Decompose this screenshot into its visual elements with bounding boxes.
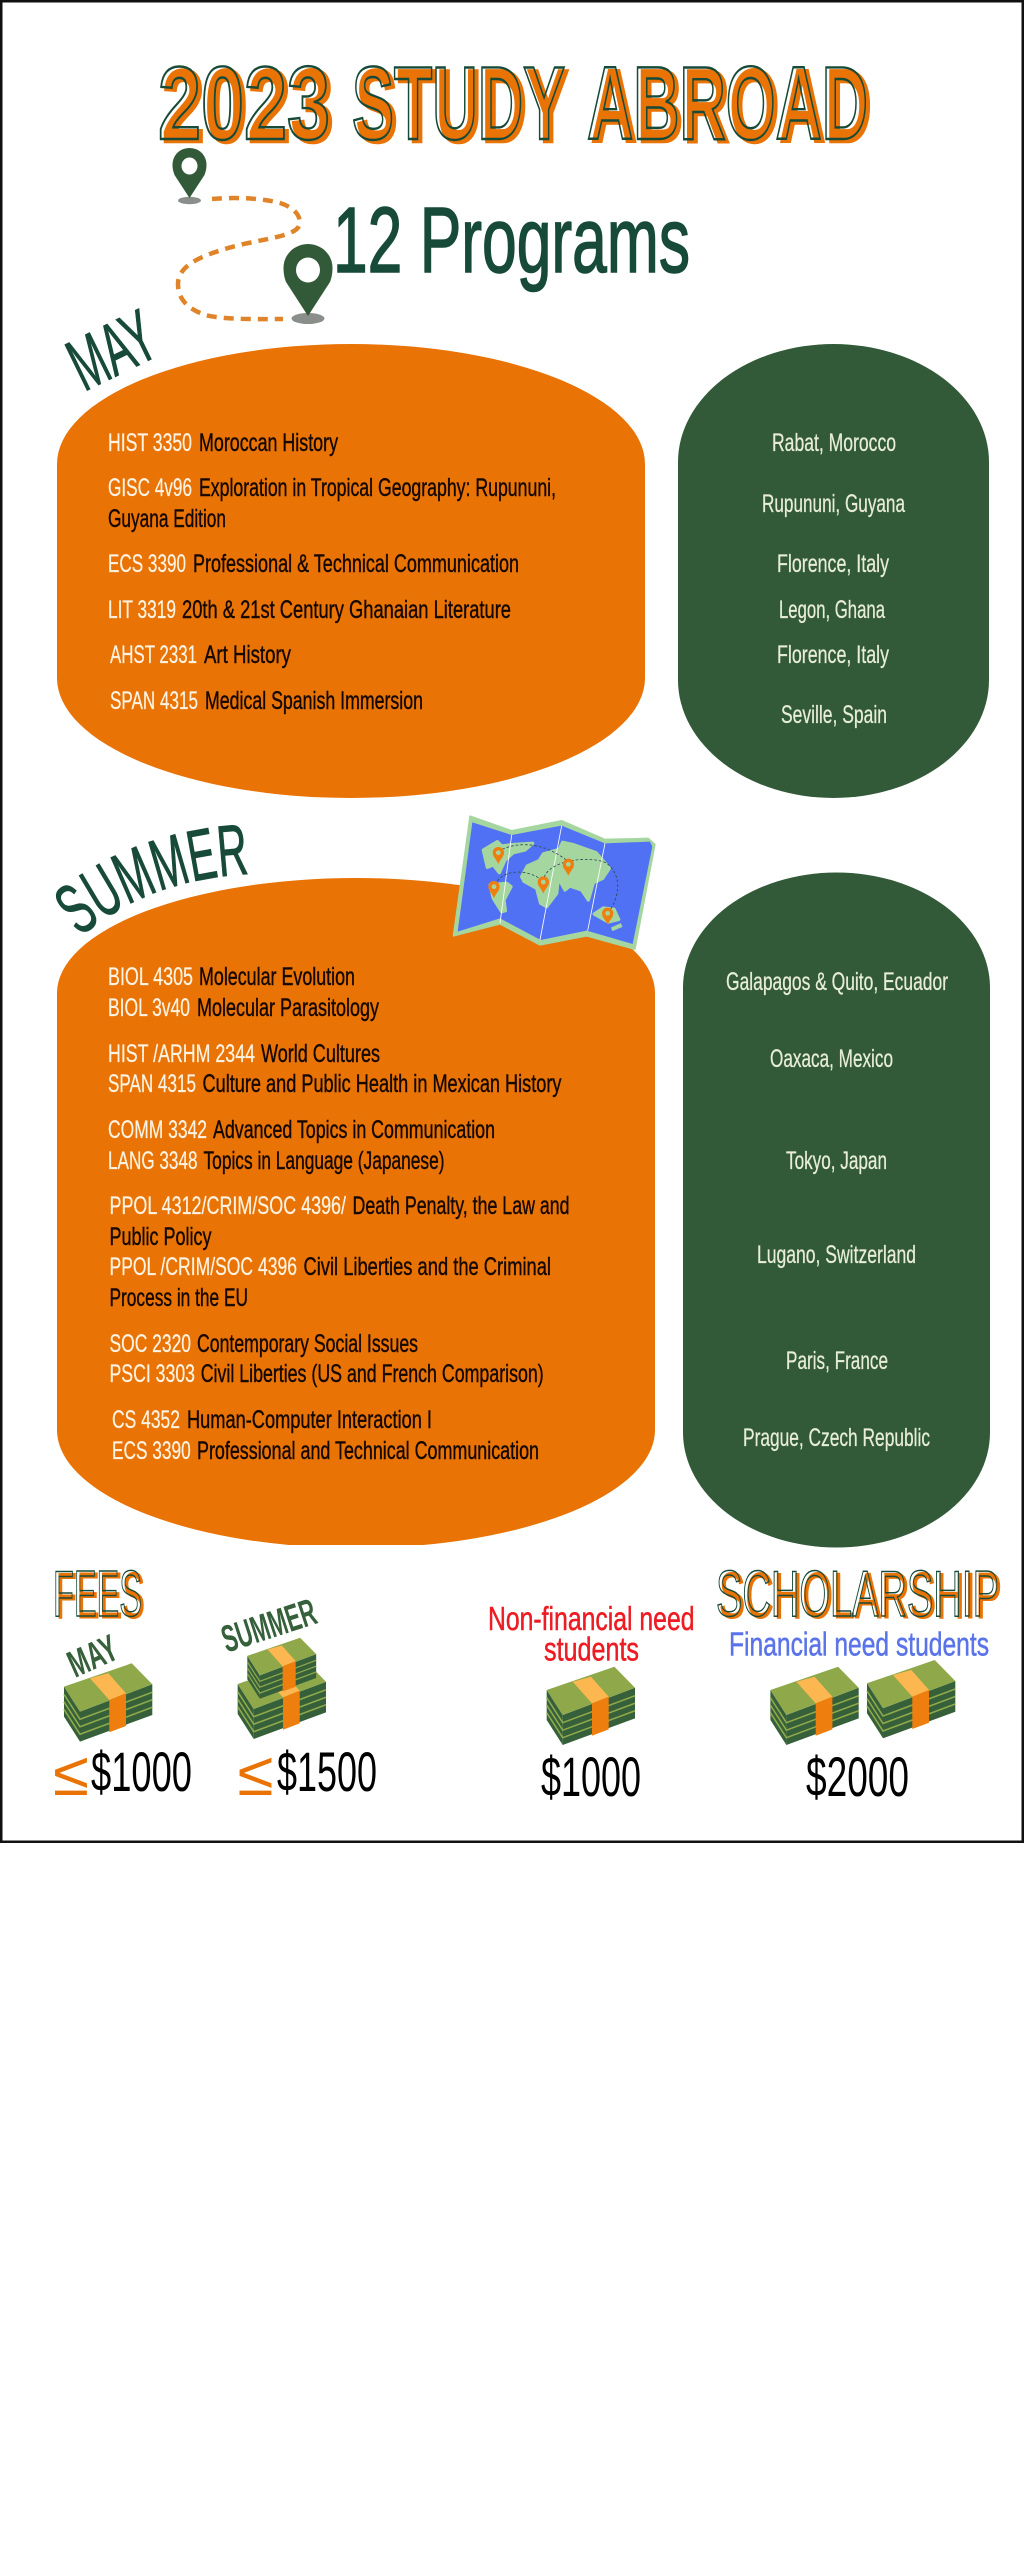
course: GISC 4v96: Guyana Edition (108, 505, 226, 533)
panel: Summer locations: Tokyo, Japan (786, 1147, 887, 1175)
course: COMM 3342: COMM 3342 (108, 1116, 207, 1144)
Summer fee amount: $1500 (277, 1740, 377, 1803)
course: PPOL 4312 (110, 1192, 570, 1251)
course: LANG 3348: Topics in Language (Japanese) (204, 1147, 444, 1175)
heading: 12 Programs: 12 Programs (333, 188, 690, 292)
heading: FEES: FEES (53, 1557, 142, 1630)
course: GISC 4v96: Exploration in Tropical Geography: Rupununi, (199, 474, 556, 502)
label: Summer fee: SUMMER (217, 1591, 322, 1661)
panel: Summer locations (683, 872, 990, 1548)
panel: Summer locations: Lugano, Switzerland (757, 1241, 916, 1269)
panel: Summer locations: Prague, Czech Republic (743, 1424, 930, 1452)
panel: Summer courses (57, 878, 655, 1545)
panel: May courses (57, 344, 645, 798)
label: non-financial need students (488, 1600, 694, 1668)
May fee amount: $1000 (91, 1740, 192, 1803)
Summer fee amount: ≤ (238, 1740, 274, 1809)
icon: Summer cash stacks (238, 1638, 326, 1739)
label: May fee: MAY (62, 1628, 124, 1686)
heading: MAY: MAY (55, 294, 169, 406)
panel: May locations: Rupununi, Guyana (762, 490, 905, 518)
panel: Summer locations: Oaxaca, Mexico (770, 1045, 893, 1073)
course: PPOL /CRIM/SOC 4396: Process in the EU (110, 1284, 248, 1312)
course: LIT 3319: 20th & 21st Century Ghanaian Literature (182, 596, 511, 624)
label: non-financial need students: students (544, 1631, 639, 1668)
course: PPOL 4312: Public Policy (110, 1223, 212, 1251)
course: LIT 3319: LIT 3319 (108, 596, 176, 624)
course: HIST 3350: HIST 3350 (108, 429, 192, 457)
course: ECS 3390 (112, 1437, 539, 1465)
title: STUDY (356, 49, 569, 165)
course: BIOL 3v40: BIOL 3v40 (108, 994, 190, 1022)
course: SOC 2320: Contemporary Social Issues (197, 1330, 418, 1358)
panel: May locations: Florence, Italy (777, 641, 889, 669)
course: BIOL 4305: Molecular Evolution (199, 963, 355, 991)
course: SPAN 4315: Culture and Public Health in Mexican History (202, 1070, 562, 1098)
icon: world map (453, 816, 655, 949)
course: HIST 3350: Moroccan History (199, 429, 338, 457)
title (158, 46, 872, 165)
course: BIOL 3v40: Molecular Parasitology (197, 994, 379, 1022)
course: LIT 3319 (108, 596, 511, 624)
course: PPOL 4312: Death Penalty, the Law and (352, 1192, 570, 1220)
amount: financial need scholarship: $2000 (806, 1745, 909, 1808)
course: COMM 3342 (108, 1116, 495, 1144)
heading: SUMMER: SUMMER (56, 825, 248, 932)
label: non-financial need students: Non-financial need (488, 1600, 694, 1637)
page border (1, 1, 1023, 1842)
panel: Summer locations: Paris, France (786, 1347, 888, 1375)
course: GISC 4v96 (108, 474, 556, 533)
course: PPOL /CRIM/SOC 4396: Civil Liberties and the Criminal (304, 1253, 551, 1281)
course: LANG 3348: LANG 3348 (108, 1147, 198, 1175)
course: GISC 4v96: GISC 4v96 (108, 474, 192, 502)
course: ECS 3390: ECS 3390 (112, 1437, 191, 1465)
course: ECS 3390: Professional & Technical Communication (193, 550, 519, 578)
course: CS 4352 (112, 1406, 432, 1434)
course: PSCI 3303: Civil Liberties (US and French Comparison) (201, 1360, 544, 1388)
course: PPOL /CRIM/SOC 4396: PPOL /CRIM/SOC 4396 (110, 1253, 297, 1281)
panel: May locations (678, 344, 989, 798)
May fee amount: ≤ (53, 1740, 89, 1809)
course: COMM 3342: Advanced Topics in Communication (213, 1116, 495, 1144)
heading: FEES: FEES (56, 1559, 145, 1632)
title: 2023 (162, 49, 334, 165)
route with location pins (172, 148, 332, 324)
course: SOC 2320: SOC 2320 (110, 1330, 191, 1358)
course: HIST /ARHM 2344: HIST /ARHM 2344 (108, 1040, 255, 1068)
heading: FEES (53, 1557, 145, 1632)
course: ECS 3390: Professional and Technical Communication (197, 1437, 539, 1465)
title: 2023 (158, 46, 330, 162)
course: SPAN 4315: SPAN 4315 (108, 1070, 196, 1098)
panel: May locations: Rabat, Morocco (772, 429, 896, 457)
amount: non-financial scholarship: $1000 (541, 1745, 641, 1808)
icon: non-financial cash stack (547, 1667, 635, 1745)
course: CS 4352: CS 4352 (112, 1406, 180, 1434)
course: HIST /ARHM 2344: World Cultures (261, 1040, 380, 1068)
course: BIOL 4305 (108, 963, 355, 991)
panel: May locations: Florence, Italy (777, 550, 889, 578)
panel: May locations: Seville, Spain (781, 701, 887, 729)
course: PSCI 3303 (110, 1360, 544, 1388)
course: HIST 3350 (108, 429, 338, 457)
May fee amount (53, 1740, 192, 1809)
icon: financial need cash stacks (770, 1660, 955, 1745)
course: CS 4352: Human-Computer Interaction I (187, 1406, 432, 1434)
course: BIOL 4305: BIOL 4305 (108, 963, 193, 991)
course: AHST 2331: AHST 2331 (110, 641, 197, 669)
course: AHST 2331: Art History (204, 641, 291, 669)
course: SPAN 4315: Medical Spanish Immersion (205, 687, 423, 715)
course: PSCI 3303: PSCI 3303 (110, 1360, 195, 1388)
course: PPOL 4312: PPOL 4312/CRIM/SOC 4396/ (110, 1192, 346, 1220)
course: LANG 3348 (108, 1147, 444, 1175)
course: SOC 2320 (110, 1330, 418, 1358)
course: SPAN 4315 (108, 1070, 562, 1098)
course: PPOL /CRIM/SOC 4396 (110, 1253, 551, 1312)
course: ECS 3390: ECS 3390 (108, 550, 186, 578)
course: BIOL 3v40 (108, 994, 379, 1022)
title: STUDY (352, 46, 565, 162)
course: SPAN 4315 (110, 687, 423, 715)
course: SPAN 4315: SPAN 4315 (110, 687, 198, 715)
course: ECS 3390 (108, 550, 519, 578)
icon: May cash stack (64, 1663, 152, 1742)
Summer fee amount (238, 1740, 377, 1809)
panel: May locations: Legon, Ghana (779, 596, 885, 624)
